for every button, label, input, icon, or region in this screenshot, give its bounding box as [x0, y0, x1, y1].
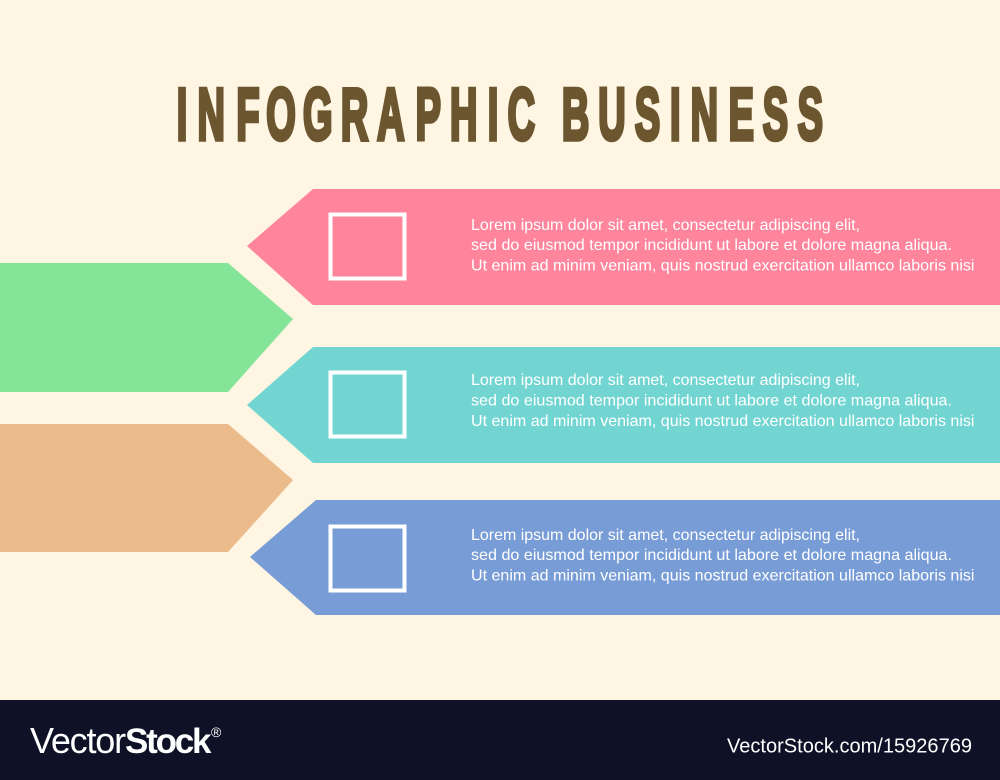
panel: blue arrow: [250, 500, 1000, 615]
panel: pink arrow: [247, 189, 1000, 305]
text block: pink: Lorem ipsum dolor sit amet, consectetur adipiscing elit,: [471, 217, 860, 234]
text block: teal: sed do eiusmod tempor incididunt ut labore et dolore magna aliqua.: [471, 392, 952, 410]
text block: pink: sed do eiusmod tempor incididunt ut labore et dolore magna aliqua.: [471, 237, 952, 254]
text block: teal: Lorem ipsum dolor sit amet, consectetur adipiscing elit,: [471, 372, 860, 389]
panel: teal arrow: [247, 347, 1000, 463]
icon: teal square: [330, 372, 404, 436]
text block: blue: Lorem ipsum dolor sit amet, consectetur adipiscing elit,: [471, 527, 860, 544]
icon: pink square: [330, 214, 404, 278]
panel: green arrow: [0, 263, 293, 392]
footer logo: ®: [211, 724, 222, 740]
footer url: VectorStock.com/15926769: [727, 736, 972, 758]
icon: blue square: [330, 526, 404, 590]
footer logo: Vector: [30, 720, 125, 761]
text block: pink: Ut enim ad minim veniam, quis nostrud exercitation ullamco laboris nisi: [471, 258, 974, 274]
panel: orange arrow: [0, 424, 293, 552]
text block: blue: sed do eiusmod tempor incididunt ut labore et dolore magna aliqua.: [471, 547, 952, 564]
text block: teal: Ut enim ad minim veniam, quis nostrud exercitation ullamco laboris nisi: [471, 413, 974, 430]
footer logo: Stock: [125, 722, 212, 761]
title: INFOGRAPHIC BUSINESS: [177, 75, 823, 156]
text block: blue: Ut enim ad minim veniam, quis nostrud exercitation ullamco laboris nisi: [471, 568, 974, 584]
footer bar: [0, 700, 1000, 780]
